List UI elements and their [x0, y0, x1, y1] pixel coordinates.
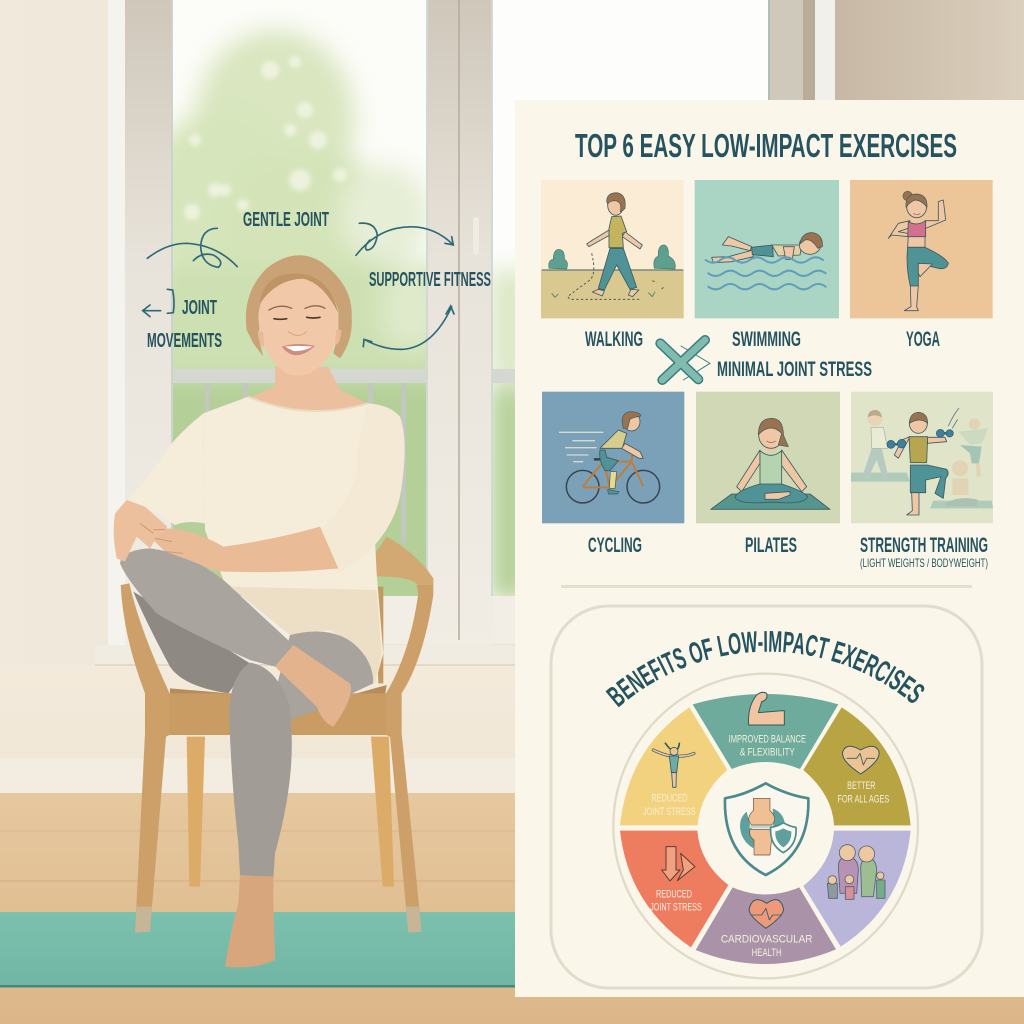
segment: better for all ages	[803, 707, 911, 825]
yoga mat	[0, 912, 515, 988]
panel: benefits frame	[551, 606, 982, 988]
panel: exercises and benefits	[515, 100, 1024, 997]
card: yoga	[850, 180, 993, 318]
segment: cardiovascular health: HEALTH	[752, 947, 782, 959]
card: walking	[541, 180, 684, 318]
segment: all ages family	[803, 831, 911, 947]
segment: cardiovascular health	[696, 887, 836, 964]
segment: reduced joint stress upper: REDUCED	[651, 793, 687, 805]
annotation: joint: JOINT	[182, 297, 217, 319]
label: cycling: CYCLING	[588, 534, 642, 557]
card: pilates	[696, 392, 840, 523]
card: swimming	[695, 180, 839, 318]
segment: reduced joint stress lower: JOINT STRESS	[650, 902, 702, 914]
face	[258, 277, 338, 375]
label: pilates: PILATES	[745, 534, 797, 557]
neck	[247, 367, 370, 427]
chair seat	[168, 685, 387, 735]
facial features	[269, 306, 325, 355]
segment: reduced joint stress lower	[620, 831, 728, 947]
label: walking: WALKING	[585, 328, 643, 351]
woman and chair	[114, 255, 433, 967]
chair back legs and post	[187, 537, 433, 887]
arms and hands	[153, 527, 338, 572]
card: strength training	[851, 392, 993, 523]
segment: reduced joint stress lower: REDUCED	[656, 888, 692, 900]
segment: cardiovascular health: CARDIOVASCULAR	[721, 934, 812, 946]
hair back	[246, 255, 352, 358]
card: cycling	[542, 392, 684, 523]
sleeves	[127, 413, 205, 525]
title: benefits curved heading: BENEFITS OF LOW-IMPACT EXERCISES	[606, 631, 924, 708]
annotation: movements: MOVEMENTS	[147, 330, 222, 352]
segment: reduced joint stress upper	[620, 707, 727, 825]
segment: improved balance: & FLEXIBILITY	[740, 746, 795, 758]
segment: improved balance: IMPROVED BALANCE	[729, 734, 806, 746]
hair front	[260, 273, 338, 313]
chair front frame	[121, 583, 433, 933]
benefits wheel	[613, 674, 918, 978]
annotation: supportive fitness: SUPPORTIVE FITNESS	[369, 269, 491, 291]
label: swimming: SWIMMING	[732, 328, 801, 351]
label: minimal joint stress: MINIMAL JOINT STRESS	[717, 358, 872, 381]
annotation: gentle joint: GENTLE JOINT	[243, 209, 329, 231]
ears	[258, 330, 342, 347]
segment: reduced joint stress upper: JOINT STRESS	[643, 806, 696, 818]
window	[95, 0, 835, 666]
segment: improved balance	[693, 692, 838, 769]
annotation arrows	[143, 223, 454, 349]
legs	[120, 548, 373, 967]
label: yoga: YOGA	[906, 328, 940, 351]
segment: better for all ages: FOR ALL AGES	[837, 793, 890, 805]
sweater body	[203, 397, 383, 683]
icon: crossed joint stress mark	[660, 340, 710, 380]
icon: joint shield	[725, 783, 808, 875]
segment: better for all ages: BETTER	[847, 780, 875, 792]
